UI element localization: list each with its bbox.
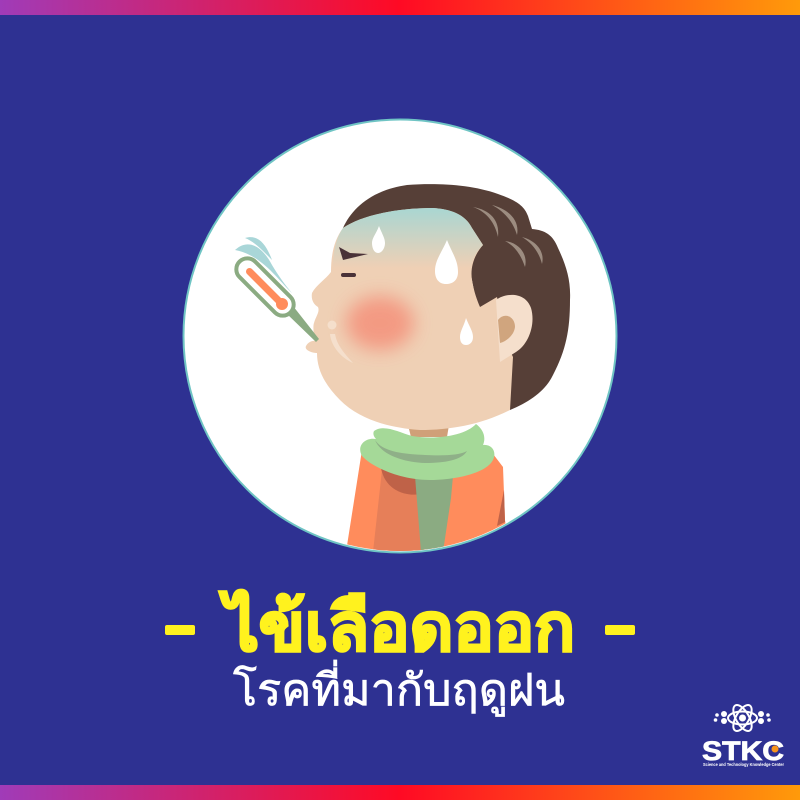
illustration circle — [184, 120, 616, 552]
cheek dimple — [328, 320, 336, 330]
forehead fever gradient — [333, 208, 483, 268]
head — [306, 184, 570, 430]
title dash right — [605, 625, 635, 635]
subtitle: โรคที่มากับฤดูฝน — [233, 659, 565, 717]
cheek blush — [346, 296, 414, 350]
heat waves — [245, 237, 272, 260]
neck — [408, 425, 449, 437]
hair highlights — [473, 205, 543, 267]
sweat drops — [372, 226, 385, 253]
logo tagline: Science and Technology Knowledge Center — [703, 762, 784, 767]
smile highlight — [330, 334, 353, 363]
closed eye — [341, 273, 356, 277]
face — [306, 208, 513, 430]
bottom gradient bar — [0, 785, 800, 800]
ear — [496, 295, 533, 362]
logo wordmark: STKC — [702, 736, 784, 766]
atom icon — [728, 702, 757, 734]
top gradient bar — [0, 0, 800, 15]
thermometer — [232, 237, 319, 342]
title: ไข้เลือดออก — [219, 589, 575, 664]
logo dot — [772, 746, 778, 752]
logo dots — [714, 711, 771, 724]
scarf — [360, 424, 494, 480]
eyebrow — [339, 247, 368, 260]
STKC logo — [702, 702, 784, 767]
title dash left — [165, 625, 195, 635]
hair — [343, 184, 570, 410]
torso and jacket — [346, 450, 510, 552]
